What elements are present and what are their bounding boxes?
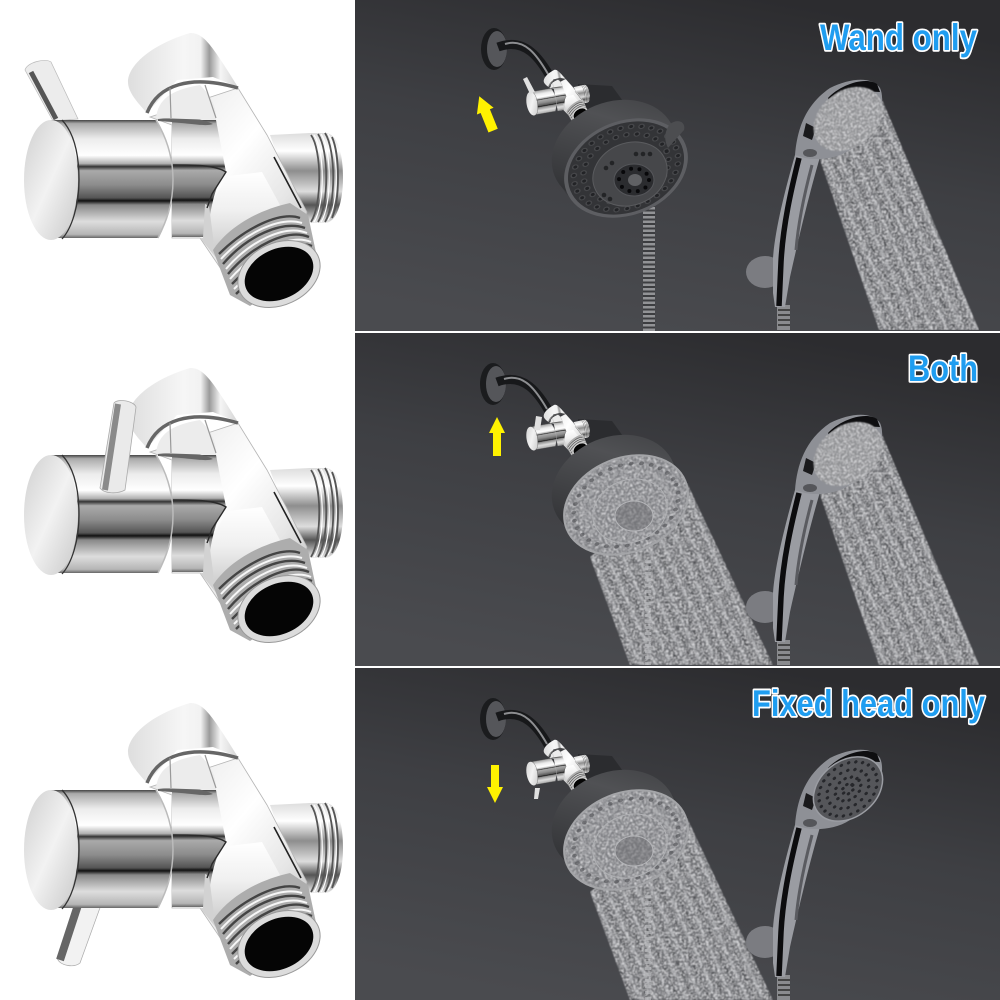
panel: chrome valve, wand position (24, 33, 343, 320)
wand face (801, 744, 895, 834)
panel: both (355, 333, 1000, 666)
wand lit face (801, 74, 895, 164)
icon: up arrow (471, 93, 501, 134)
label: both: Both (908, 348, 978, 389)
diverter handle (523, 77, 535, 94)
hand wand (746, 80, 882, 330)
wand spray (819, 432, 979, 665)
icon: up arrow (489, 417, 505, 456)
shower arm (481, 28, 552, 80)
hand wand (746, 415, 882, 665)
panel: wand only (355, 0, 1000, 331)
fixed shower head with spray (522, 735, 773, 1000)
fixed shower head (522, 65, 703, 331)
panel: fixed head only (355, 668, 1000, 1000)
shower arm (480, 363, 551, 415)
panel: chrome valve, fixed head position (24, 703, 343, 990)
fixed shower head with spray (522, 400, 773, 665)
panel: chrome valve, both position (24, 368, 343, 655)
shower arm (480, 698, 551, 750)
icon: down arrow (487, 765, 503, 803)
hand wand (746, 750, 882, 1000)
diverter handle (534, 788, 540, 799)
wand lit face (801, 409, 895, 499)
diverter handle (534, 416, 542, 430)
wand spray (819, 97, 979, 330)
